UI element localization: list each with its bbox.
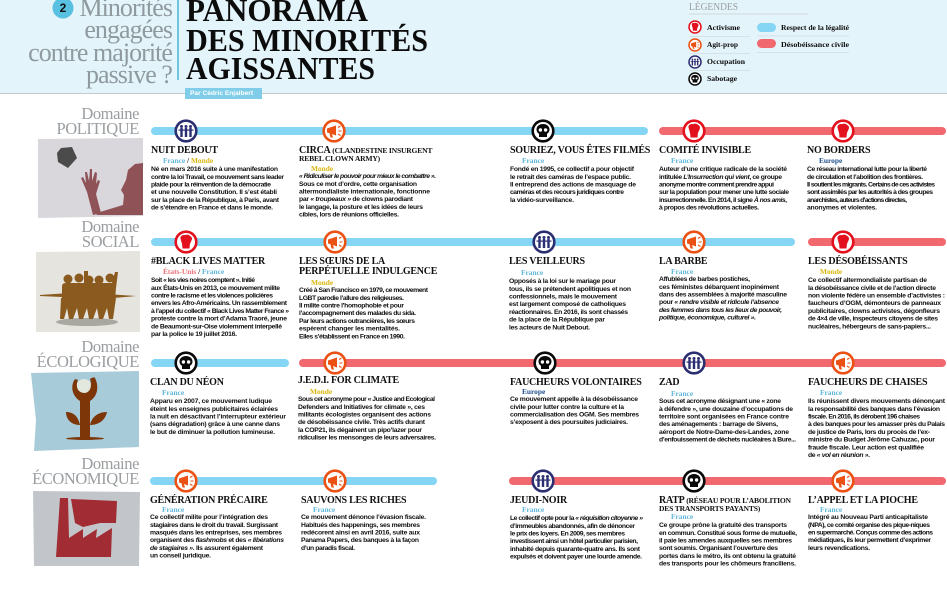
card: ZAD: à défendre », une douzaine d’occupations de xyxy=(659,406,793,413)
card: Jeudi-Noir: d’immeubles abandonnés, afin de dénoncer xyxy=(510,523,635,530)
card: Sauvons les riches: Habitués des happenings, ses membres xyxy=(301,522,420,529)
card: Jeudi-Noir: Le collectif opte pour la « réquisition citoyenne » xyxy=(510,515,643,522)
card: Clan du Néon: éteint les enseignes publicitaires éclairées xyxy=(150,406,278,413)
card: Clan du Néon: France xyxy=(162,388,184,397)
card: Les Désobéissants xyxy=(808,255,945,330)
card: Les Sœurs de la perpétuelle indulgence: Monde xyxy=(311,278,333,287)
card: Les Veilleurs: France xyxy=(521,268,543,277)
card: Faucheurs volontaires: s’exposent à des poursuites judiciaires. xyxy=(510,419,628,426)
card: Jeudi-Noir: France xyxy=(522,505,544,514)
card: Souriez, vous êtes filmés: France xyxy=(522,156,544,165)
card: Sauvons les riches: d’un paradis fiscal. xyxy=(301,545,355,552)
legend: Respect de la légalité xyxy=(781,23,850,32)
card: Black Lives Matter: contre le racisme et les violences policières xyxy=(151,293,273,300)
card: Les Veilleurs: LES VEILLEURS xyxy=(509,256,585,267)
heading: domaine economique: Domaine xyxy=(81,454,139,473)
card: Faucheurs de chaises: à des banques pour les amasser près du Palais xyxy=(808,421,945,428)
card: Les Sœurs de la perpétuelle indulgence: LES SŒURS DE LA xyxy=(299,256,385,267)
card: Les Veilleurs: les acteurs de Nuit Debout. xyxy=(509,324,590,331)
card: L'Appel et la Pioche: Intégré au Nouveau Parti anticapitaliste xyxy=(808,514,928,521)
card: Nuit Debout: NUIT DEBOUT xyxy=(151,145,218,156)
card: J.E.D.I. for Climate: J.E.D.I. FOR CLIMATE xyxy=(298,375,399,386)
card: Black Lives Matter: par la police le 19 juillet 2016. xyxy=(151,331,237,338)
card: No Borders: anonymes et violentes. xyxy=(807,205,877,212)
card: Sauvons les riches xyxy=(301,495,426,552)
card: Les Désobéissants: nucléaires, hébergeurs de sans-papiers... xyxy=(808,323,931,330)
card: Les Sœurs de la perpétuelle indulgence: LGBT parodie l’allure des religieuses. xyxy=(299,295,404,302)
card: CIRCA: altermondialiste internationale, fonctionne xyxy=(299,189,430,196)
bar row: economique xyxy=(150,471,946,491)
card: Jeudi-Noir xyxy=(510,495,643,561)
byline tag xyxy=(185,88,262,99)
card: CIRCA: cibles, lors de réunions officielles. xyxy=(299,212,399,219)
card: No Borders: Il soutient les migrants. Certains de ces activistes xyxy=(807,182,935,189)
card: J.E.D.I. for Climate: ridiculiser les mensonges de leurs adversaires. xyxy=(298,435,436,442)
card: Souriez, vous êtes filmés: le retrait des caméras de l’espace public. xyxy=(510,174,631,181)
card: Faucheurs de chaises: ministre du Budget Jérôme Cahuzac, pour xyxy=(808,437,935,444)
card: Génération précaire: organisent des flashmobs et des « libérations xyxy=(150,537,284,544)
illustration: economique xyxy=(33,491,140,566)
card: Faucheurs de chaises xyxy=(808,377,946,459)
legend: Sabotage xyxy=(707,74,738,83)
card: Les Désobéissants: LES DÉSOBÉISSANTS xyxy=(808,256,907,267)
legend: Désobéissance civile xyxy=(781,40,850,49)
card: ZAD: Sous cet acronyme désignant une « zone xyxy=(659,398,781,405)
card: Black Lives Matter: Soit « les vies noires comptent ». Initié xyxy=(151,277,255,284)
card: Nuit Debout xyxy=(151,145,284,212)
card: RATP: en commun. Constitué sous forme de mutuelle, xyxy=(659,530,797,537)
card: Comité invisible: insurrectionnelle. En 2014, il signe À nos amis, xyxy=(659,195,787,204)
card: CIRCA: le langage, la posture et les idées de leurs xyxy=(299,204,423,211)
card: Génération précaire: Ce collectif milite pour l’intégration des xyxy=(150,514,268,521)
card: Les Désobéissants: Ce collectif altermondialiste partisan de xyxy=(808,277,927,284)
card: Les Désobéissants: non violente fédère un ensemble d’activistes : xyxy=(808,293,945,300)
card: Jeudi-Noir: JEUDI-NOIR xyxy=(510,495,567,506)
card: No Borders: Ce réseau international lutte pour la liberté xyxy=(807,166,927,173)
card: Black Lives Matter: de Beaumont-sur-Oise violemment interpellé xyxy=(151,323,282,330)
card: Les Veilleurs: tous, ils se prétendent apolitiques et non xyxy=(509,286,631,293)
card: Black Lives Matter: envers les Afro-Américains. Un rassemblement xyxy=(151,300,288,307)
card: Les Veilleurs: réactionnaires. En 2016, ils sont chassés xyxy=(509,309,628,316)
heading: domaine ecologique: ÉCOLOGIQUE xyxy=(37,352,139,371)
card: L'Appel et la Pioche: (NPA), ce comité organise des pique-niques xyxy=(808,522,930,529)
card: Les Sœurs de la perpétuelle indulgence: Il milite contre l’homophobie et pour xyxy=(299,303,404,310)
card: Faucheurs volontaires xyxy=(510,377,642,426)
card: Génération précaire: un conseil juridique. xyxy=(150,553,211,560)
card: J.E.D.I. for Climate xyxy=(298,375,436,442)
subtitle question: passive ? xyxy=(86,60,172,89)
card: RATP: France xyxy=(671,512,693,521)
card: Les Sœurs de la perpétuelle indulgence: l’accompagnement des malades du sida. xyxy=(299,310,416,317)
card: La Barbe xyxy=(658,256,787,322)
card: Comité invisible xyxy=(659,144,789,212)
card: Faucheurs volontaires: Europe xyxy=(522,387,545,396)
number badge: 2 xyxy=(60,1,67,15)
card: RATP: il paie les amendes auxquelles ses membres xyxy=(659,538,792,545)
bar row: ecologique xyxy=(151,353,946,373)
card: ZAD: France xyxy=(671,389,693,398)
card: Sauvons les riches: Ce mouvement dénonce l’évasion fiscale. xyxy=(301,514,426,521)
card: Faucheurs de chaises: la responsabilité des banques dans l’évasion xyxy=(808,406,940,413)
card: Génération précaire: France xyxy=(162,505,184,514)
card: Faucheurs de chaises: fiscale. En 2016, ils dérobent 196 chaises xyxy=(808,414,920,421)
card: J.E.D.I. for Climate: de désobéissance civile. Très actifs durant xyxy=(298,419,426,426)
card: CIRCA: par « troupeaux » de clowns parodiant xyxy=(299,196,414,203)
card: L'Appel et la Pioche: en supermarché. Conçus comme des actions xyxy=(808,530,933,537)
card: No Borders: Europe xyxy=(819,156,842,165)
card: Comité invisible: à propos des révolutions actuelles. xyxy=(659,205,759,212)
card: CIRCA: REBEL CLOWN ARMY) xyxy=(299,154,380,163)
card: No Borders: NO BORDERS xyxy=(807,145,870,156)
card: Faucheurs volontaires: commercialisation des OGM. Ses membres xyxy=(510,412,639,419)
card: La Barbe: France xyxy=(671,267,693,276)
card: Les Veilleurs: de la place de la République par xyxy=(509,317,605,324)
card: Génération précaire: GÉNÉRATION PRÉCAIRE xyxy=(150,495,268,506)
heading: domaine ecologique: Domaine xyxy=(81,337,139,356)
card: Jeudi-Noir: le prix des loyers. En 2009, ses membres xyxy=(510,531,625,538)
card: Sauvons les riches: France xyxy=(313,505,335,514)
card: RATP xyxy=(659,495,797,568)
heading: domaine social: Domaine xyxy=(81,217,139,236)
card: Les Veilleurs: Opposés à la loi sur le mariage pour xyxy=(509,278,616,285)
card: Clan du Néon: le but de diminuer la pollution lumineuse. xyxy=(150,429,275,436)
card: ZAD: territoire sont organisées en France contre xyxy=(659,414,789,421)
card: Souriez, vous êtes filmés xyxy=(510,144,650,204)
card: Souriez, vous êtes filmés: Il entreprend des actions de masquage de xyxy=(510,182,636,189)
card: ZAD xyxy=(659,377,796,444)
subtitle question: engagées xyxy=(84,15,172,44)
card: Les Sœurs de la perpétuelle indulgence: Créé à San Francisco en 1979, ce mouvement xyxy=(299,287,429,294)
heading: domaine social xyxy=(81,217,139,251)
card: J.E.D.I. for Climate: la COP21, ils dégainent un pipo’lazer pour xyxy=(298,427,422,434)
card: Black Lives Matter xyxy=(151,256,289,338)
bar row: social xyxy=(151,232,946,252)
main title xyxy=(186,0,428,86)
card: L'Appel et la Pioche xyxy=(808,495,933,552)
card: Black Lives Matter: #BLACK LIVES MATTER xyxy=(151,256,265,267)
heading: domaine politique xyxy=(56,104,139,138)
card: La Barbe: politique, économique, culturel ». xyxy=(658,315,756,322)
card: Les Désobéissants: faucheurs d’OGM, démonteurs de panneaux xyxy=(808,300,941,307)
card: Jeudi-Noir: expulsés et doivent payer une lourde amende. xyxy=(510,554,642,561)
card: La Barbe: Affublées de barbes postiches, xyxy=(659,276,750,283)
card: No Borders xyxy=(807,145,935,212)
card: Clan du Néon: (sans dégradation) grâce à une canne dans xyxy=(150,421,280,428)
card: RATP: Ce groupe prône la gratuité des transports xyxy=(659,522,787,529)
card: Faucheurs volontaires: civile pour lutter contre la culture et la xyxy=(510,404,624,411)
card: Sauvons les riches: SAUVONS LES RICHES xyxy=(301,495,406,506)
card: RATP: des transports pour les chômeurs franciliens. xyxy=(659,561,796,568)
card: Souriez, vous êtes filmés: la vidéo-surveillance. xyxy=(510,197,574,204)
illustration: ecologique xyxy=(31,371,139,451)
card: Sauvons les riches: Panama Papers, des banques à la façon xyxy=(301,537,419,544)
byline tag: Par Cédric Enjalbert xyxy=(190,90,253,97)
card: Nuit Debout: Né en mars 2016 suite à une manifestation xyxy=(151,166,278,173)
card: La Barbe: ces féministes débarquent inopinément xyxy=(659,284,780,291)
card: ZAD: aéroport de Notre-Dame-des-Landes, zone xyxy=(659,429,789,436)
card: Clan du Néon: Apparu en 2007, ce mouvement ludique xyxy=(150,398,272,405)
legend xyxy=(689,1,850,85)
card: Les Sœurs de la perpétuelle indulgence: Par leurs actions outrancières, les sœurs xyxy=(299,318,415,325)
card: ZAD: ZAD xyxy=(659,377,679,388)
card: Comité invisible: Auteur d’une critique radicale de la société xyxy=(659,166,787,173)
card: Jeudi-Noir: inhabité depuis quarante-quatre ans. Ils sont xyxy=(510,546,641,553)
legend: LÉGENDES xyxy=(689,1,738,13)
card: Génération précaire: de stagiaires ». Ils assurent également xyxy=(150,545,264,552)
card: ZAD: d’enfouissement de déchets nucléaires à Bure... xyxy=(659,437,796,444)
heading: domaine economique: ÉCONOMIQUE xyxy=(32,469,139,488)
card: No Borders: sont assimilés par les autorités à des groupes xyxy=(807,189,933,196)
card: La Barbe: LA BARBE xyxy=(659,256,707,267)
card: Faucheurs de chaises: de « vol en réunion ». xyxy=(808,452,870,459)
card: Nuit Debout: plaide pour la réinvention de la démocratie xyxy=(151,182,271,189)
card: CIRCA: CIRCA (CLANDESTINE INSURGENT xyxy=(299,145,432,156)
card: Génération précaire: masqués dans les entreprises, ses membres xyxy=(150,530,282,537)
card: Comité invisible: intitulée L’Insurrection qui vient, ce groupe xyxy=(659,174,782,181)
card: Nuit Debout: France / Monde xyxy=(163,156,213,165)
card: No Borders: anarchistes, auteurs d’actions directes, xyxy=(807,197,907,204)
legend: Activisme xyxy=(707,23,741,32)
card: Nuit Debout: de s’étendre en France et dans le monde. xyxy=(151,205,273,212)
card: ZAD: des aménagements : barrage de Sivens, xyxy=(659,421,778,428)
bar row: politique xyxy=(151,121,946,141)
card: Souriez, vous êtes filmés: Fondé en 1995, ce collectif a pour objectif xyxy=(510,166,635,173)
heading: domaine politique: Domaine xyxy=(81,104,139,123)
card: Comité invisible: France xyxy=(671,156,693,165)
card: CIRCA xyxy=(299,145,436,219)
card: La Barbe: des femmes dans tous les lieux de pouvoir, xyxy=(659,307,782,314)
card: Faucheurs de chaises: France xyxy=(820,388,842,397)
card: L'Appel et la Pioche: leurs revendications. xyxy=(808,545,870,552)
card: Black Lives Matter: aux États-Unis en 2013, ce mouvement milite xyxy=(151,283,280,292)
header divider xyxy=(177,0,179,80)
card: Les Veilleurs: est largement composé de catholiques xyxy=(509,301,626,308)
card: Génération précaire: stagiaires dans le droit du travail. Surgissant xyxy=(150,522,279,529)
heading: domaine politique: POLITIQUE xyxy=(56,119,139,138)
card: L'Appel et la Pioche: France xyxy=(820,505,842,514)
card: Clan du Néon xyxy=(150,376,286,436)
card: CIRCA: Sous ce mot d’ordre, cette organisation xyxy=(299,181,417,188)
card: Les Veilleurs: confessionnels, mais le mouvement xyxy=(509,294,618,301)
main title: DES MINORITÉS xyxy=(186,22,428,58)
heading: domaine economique xyxy=(32,454,139,488)
card: Comité invisible: anonyme montre comment prendre appui xyxy=(659,182,774,189)
card: Les Veilleurs xyxy=(509,256,631,331)
card: Faucheurs de chaises: de justice de Paris, lors du procès de l’ex- xyxy=(808,429,930,436)
card: L'Appel et la Pioche: médiatiques, ils leur permettent d’exprimer xyxy=(808,537,931,544)
heading: domaine social: SOCIAL xyxy=(82,232,139,251)
card: Faucheurs volontaires: Ce mouvement appelle à la désobéissance xyxy=(510,396,638,403)
card: Les Désobéissants: de 4×4 de ville, inspecteurs citoyens de sites xyxy=(808,316,938,323)
legend: Occupation xyxy=(707,57,746,66)
illustration: politique xyxy=(38,138,143,218)
subtitle question: contre majorité xyxy=(28,38,172,67)
card: RATP: sont soumis. Organisant l’ouverture des xyxy=(659,545,778,552)
card: Génération précaire xyxy=(150,494,284,560)
number badge xyxy=(52,0,74,18)
card: Nuit Debout: contre la loi Travail, ce mouvement sans leader xyxy=(151,174,284,181)
card: Clan du Néon: la nuit en désactivant l’interrupteur extérieur xyxy=(150,414,286,421)
card: J.E.D.I. for Climate: Defenders and Initiatives for climate », ces xyxy=(298,404,425,411)
card: Les Désobéissants: Monde xyxy=(820,267,842,276)
card: Souriez, vous êtes filmés: SOURIEZ, VOUS ÊTES FILMÉS xyxy=(510,145,650,156)
text: Elles s’établissent en France en 1990. xyxy=(299,333,405,340)
subtitle question xyxy=(28,0,172,89)
card: Les Sœurs de la perpétuelle indulgence xyxy=(299,256,437,340)
card: J.E.D.I. for Climate: Monde xyxy=(310,387,332,396)
illustration: social xyxy=(36,251,140,332)
card: Les Désobéissants: la désobéissance civile et de l’action directe xyxy=(808,285,936,292)
card: Souriez, vous êtes filmés: caméras et des recours juridiques contre xyxy=(510,189,624,196)
card: Faucheurs de chaises: Ils réunissent divers mouvements dénonçant xyxy=(808,398,946,405)
card: Jeudi-Noir: investissent ainsi un hôtel particulier parisien, xyxy=(510,538,638,545)
card: RATP: RATP (RÉSEAU POUR L’ABOLITION xyxy=(659,495,791,506)
card: La Barbe: dans des assemblées à majorité masculine xyxy=(659,292,787,299)
card: Les Sœurs de la perpétuelle indulgence: espèrent changer les mentalités. xyxy=(299,326,400,333)
card: Black Lives Matter: États-Unis / France xyxy=(163,267,224,276)
card: Faucheurs volontaires: FAUCHEURS VOLONTAIRES xyxy=(510,377,642,388)
card: Comité invisible: sur la population pour mener une lutte sociale xyxy=(659,189,789,196)
header band xyxy=(0,0,947,94)
card: Nuit Debout: et une nouvelle Constitution. Il s’est établi xyxy=(151,189,277,196)
main title: AGISSANTES xyxy=(186,50,375,86)
card: Faucheurs de chaises: fraude fiscale. Leur action est qualifiée xyxy=(808,444,924,451)
card: Faucheurs de chaises: FAUCHEURS DE CHAISES xyxy=(808,377,927,388)
card: Comité invisible: COMITÉ INVISIBLE xyxy=(659,145,751,156)
legend: Agit-prop xyxy=(707,40,738,49)
card: RATP: DES TRANSPORTS PAYANTS) xyxy=(659,504,760,513)
card: CIRCA: Monde xyxy=(311,164,333,173)
card: Sauvons les riches: redécorent ainsi en avril 2016, suite aux xyxy=(301,530,420,537)
card: CIRCA: « Ridiculiser le pouvoir pour mieux le combattre ». xyxy=(299,173,436,180)
card: No Borders: de circulation et l’abolition des frontières. xyxy=(807,174,923,181)
card: Nuit Debout: sur la place de la République, à Paris, avant xyxy=(151,197,280,204)
card: J.E.D.I. for Climate: militants écologistes organisent des actions xyxy=(298,412,431,419)
card: Les Désobéissants: publicitaires, clowns activistes, dégonfleurs xyxy=(808,308,940,315)
card: L'Appel et la Pioche: L’APPEL ET LA PIOCHE xyxy=(808,495,918,506)
card: J.E.D.I. for Climate: Sous cet acronyme pour « Justice and Ecological xyxy=(298,396,435,403)
card: La Barbe: pour « rendre visible et ridicule l’absence xyxy=(659,299,779,306)
heading: domaine ecologique xyxy=(37,337,139,371)
card: Black Lives Matter: proteste contre la mort d’Adama Traoré, jeune xyxy=(151,316,287,323)
card: RATP: portes dans le métro, ils ont obtenu la gratuité xyxy=(659,553,796,560)
card: Les Sœurs de la perpétuelle indulgence: PERPÉTUELLE INDULGENCE xyxy=(299,266,437,277)
card: Black Lives Matter: à l’appel du collectif « Black Lives Matter France » xyxy=(151,308,289,315)
card: Clan du Néon: CLAN DU NÉON xyxy=(150,377,224,388)
